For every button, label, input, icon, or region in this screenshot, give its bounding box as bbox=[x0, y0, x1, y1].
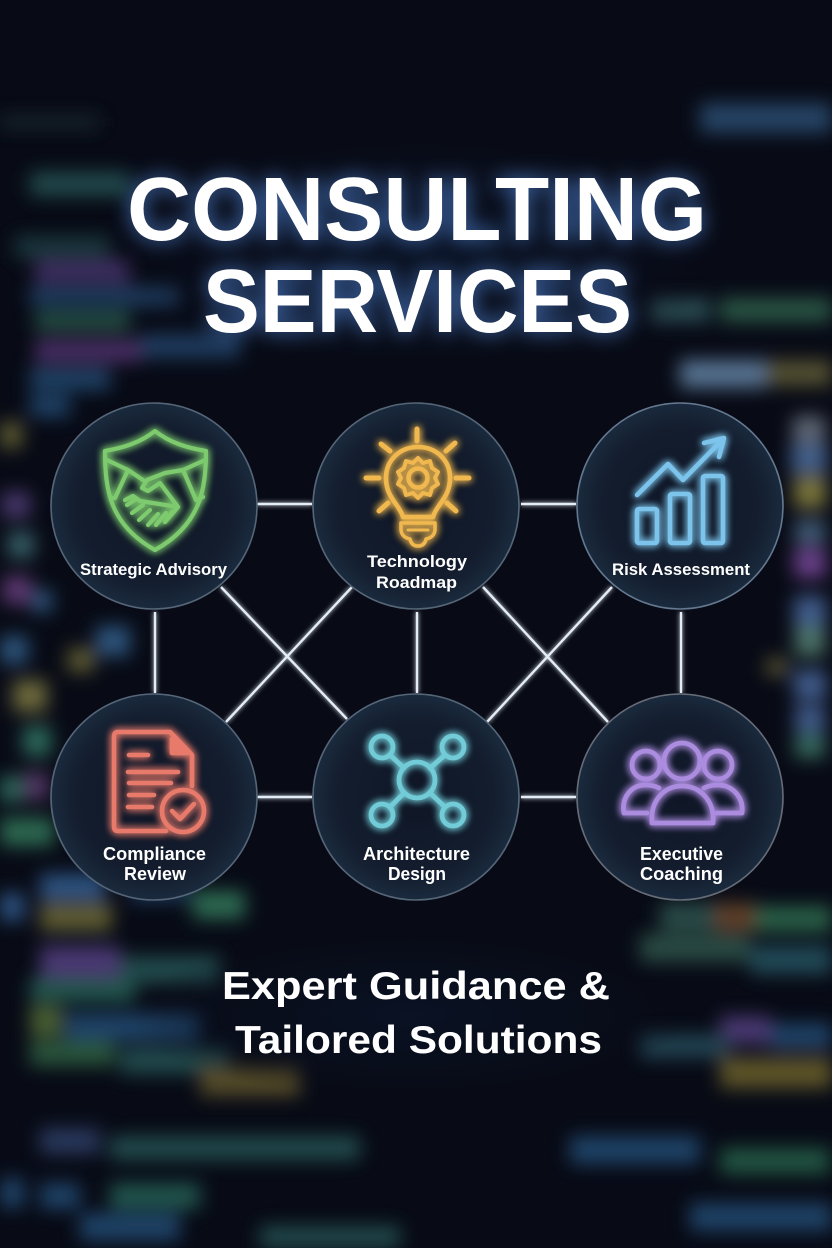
icon: bar chart with arrow bbox=[637, 438, 724, 543]
label bbox=[640, 844, 723, 884]
title: CONSULTING bbox=[127, 160, 707, 260]
label: Design bbox=[388, 864, 446, 884]
label: Roadmap bbox=[376, 573, 457, 592]
panel: Compliance Review bbox=[51, 694, 257, 900]
label bbox=[103, 844, 206, 884]
title bbox=[127, 160, 707, 352]
icon: shield with handshake bbox=[105, 431, 206, 550]
label: Technology bbox=[367, 552, 468, 571]
label: Compliance bbox=[103, 844, 206, 864]
panel: Risk Assessment bbox=[577, 403, 783, 609]
icon: document with check bbox=[114, 732, 204, 832]
icon: hub network bbox=[371, 736, 464, 826]
icon: group of people bbox=[624, 743, 742, 823]
label: Executive bbox=[640, 844, 723, 864]
label: Risk Assessment bbox=[612, 560, 750, 579]
label: Strategic Advisory bbox=[80, 560, 228, 579]
label: Coaching bbox=[640, 864, 723, 884]
label bbox=[367, 552, 468, 592]
panel: Architecture Design bbox=[313, 694, 519, 900]
tagline: Tailored Solutions bbox=[235, 1019, 602, 1062]
tagline: Expert Guidance & bbox=[222, 965, 610, 1008]
panel: Technology Roadmap bbox=[313, 403, 519, 609]
connector lines bbox=[155, 504, 681, 797]
panel: Executive Coaching bbox=[577, 694, 783, 900]
label: Architecture bbox=[363, 844, 470, 864]
tagline bbox=[222, 965, 610, 1062]
panel: Strategic Advisory bbox=[51, 403, 257, 609]
icon: light bulb with gear bbox=[366, 429, 469, 546]
title: SERVICES bbox=[203, 252, 632, 352]
label: Review bbox=[124, 864, 187, 884]
label bbox=[363, 844, 470, 884]
